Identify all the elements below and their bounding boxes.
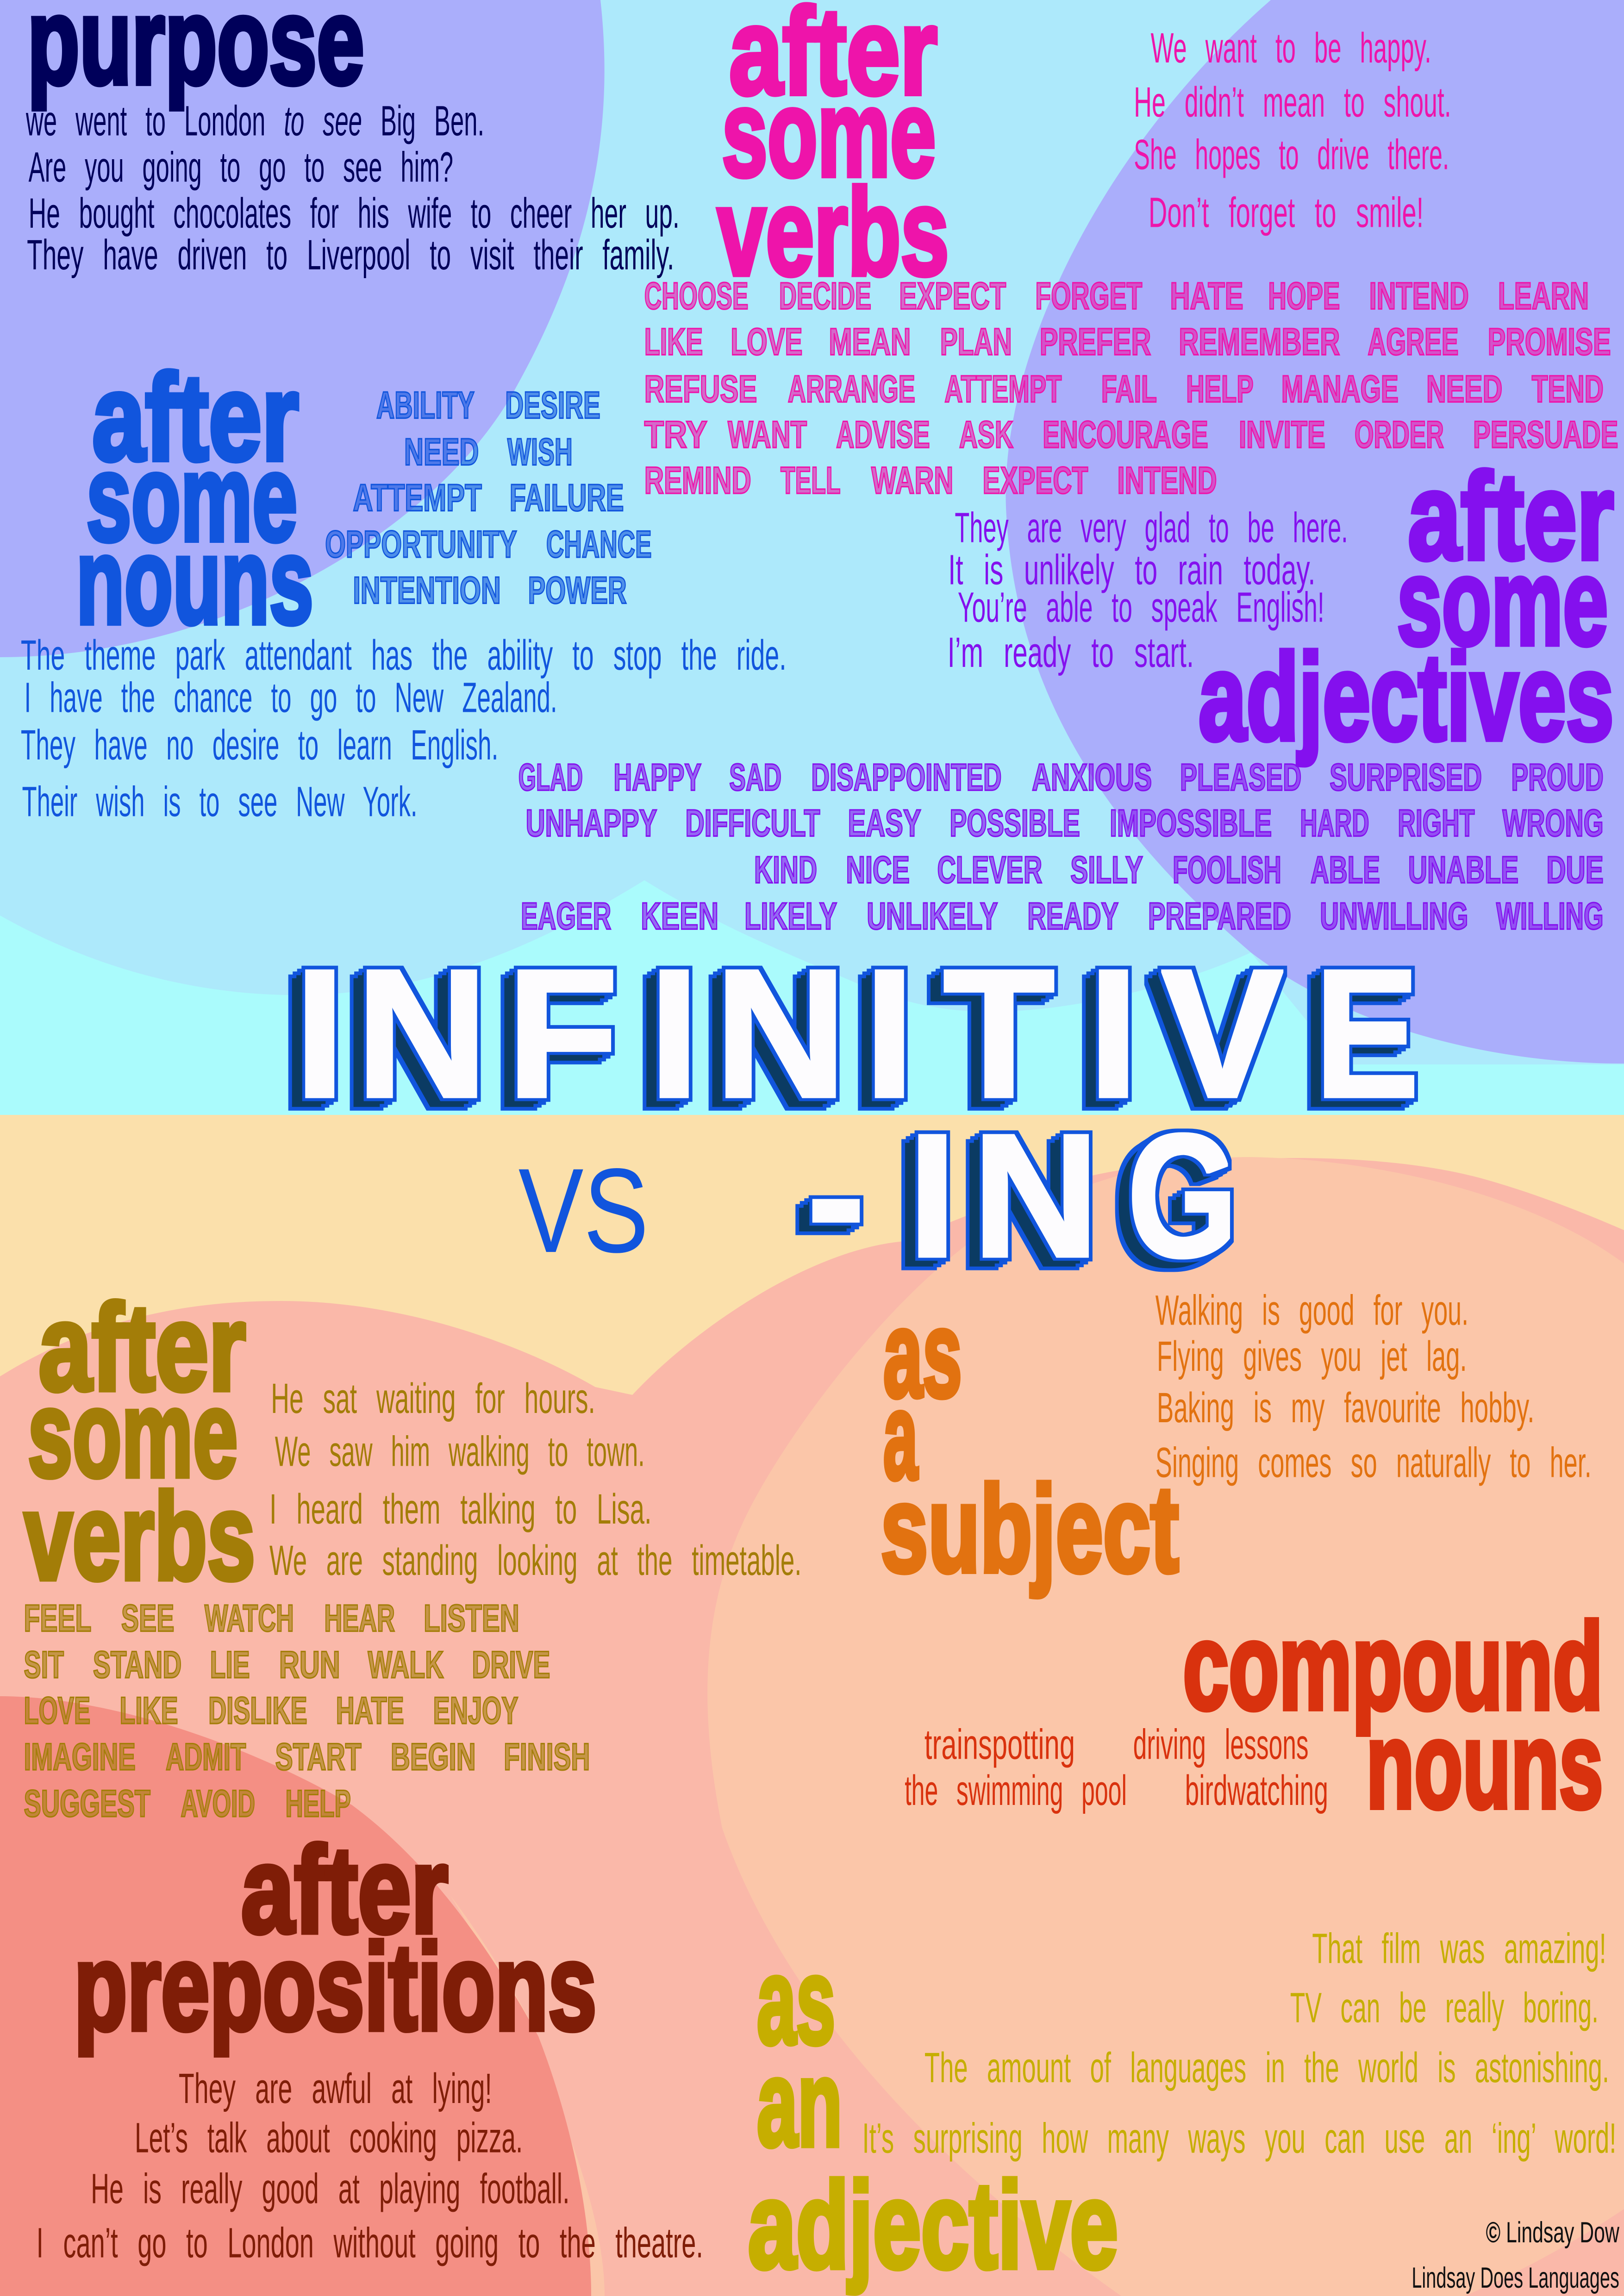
- background: light blue shape: [0, 0, 1624, 1064]
- word list: nouns followed by infinitive: [325, 383, 652, 612]
- word list: adjectives followed by infinitive: PREPARED: [1148, 894, 1291, 938]
- examples: purpose: They have driven to Liverpool to visit their family.: [27, 233, 674, 280]
- word list: verbs followed by infinitive: ARRANGE: [788, 367, 915, 411]
- heading: as a subject: as: [883, 1285, 962, 1423]
- examples: after some adjectives: You’re able to speak English!: [958, 585, 1324, 632]
- heading: as an adjective: adjective: [748, 2156, 1118, 2294]
- examples: purpose: we went to London to see Big Ben.: [25, 99, 484, 146]
- word list: adjectives followed by infinitive: CLEVER: [937, 848, 1043, 891]
- examples: after prepositions: Let’s talk about cooking pizza.: [135, 2116, 523, 2162]
- word list: adjectives followed by infinitive: ABLE: [1311, 848, 1380, 891]
- background: upper cyan band: [0, 0, 1624, 1115]
- word list: adjectives followed by infinitive: UNHAPPY: [526, 801, 657, 845]
- examples: after some adjectives: It is unlikely to rain today.: [948, 548, 1316, 595]
- word list: adjectives followed by infinitive: RIGHT: [1398, 801, 1475, 845]
- word list: verbs followed by infinitive: TELL: [781, 458, 841, 502]
- background: peach band beside red shape: [450, 1896, 605, 2296]
- word list: verbs followed by -ing: HATE: [336, 1688, 404, 1732]
- heading: after some verbs: [25, 1279, 255, 1605]
- examples: as a subject: [1156, 1288, 1592, 1487]
- word list: verbs followed by -ing: LISTEN: [424, 1596, 519, 1640]
- examples: after some verbs: Don’t forget to smile!: [1149, 190, 1424, 237]
- examples: after some verbs: [1134, 26, 1451, 237]
- examples: after some adjectives: [948, 505, 1348, 677]
- word list: verbs followed by infinitive: WARN: [871, 458, 953, 502]
- word list: adjectives followed by infinitive: ANXIOUS: [1032, 755, 1152, 799]
- panel: compound nouns: [905, 1598, 1603, 1834]
- word list: adjectives followed by infinitive: UNLIKELY: [867, 894, 998, 938]
- word list: verbs followed by infinitive: EXPECT: [899, 274, 1006, 318]
- word list: verbs followed by -ing: DISLIKE: [208, 1688, 307, 1732]
- word list: verbs followed by -ing: BEGIN: [391, 1735, 476, 1779]
- heading: after prepositions: prepositions: [74, 1918, 597, 2056]
- word list: adjectives followed by infinitive: HAPPY: [613, 755, 701, 799]
- word list: verbs followed by -ing: LIE: [210, 1643, 250, 1686]
- word list: verbs followed by -ing: WALK: [368, 1643, 444, 1686]
- panel: purpose: [25, 0, 680, 280]
- heading: after some nouns: after: [92, 348, 299, 486]
- word list: verbs followed by infinitive: NEED: [1426, 367, 1502, 411]
- word list: verbs followed by -ing: IMAGINE: [24, 1735, 136, 1779]
- word list: verbs followed by -ing: WATCH: [205, 1596, 294, 1640]
- heading: after some verbs: some: [28, 1365, 237, 1503]
- panel: as an adjective: [748, 1926, 1617, 2294]
- heading: after prepositions: after: [241, 1821, 448, 1959]
- word list: verbs followed by -ing: LOVE: [24, 1688, 90, 1732]
- examples: after some nouns: The theme park attendant has the ability to stop the ride.: [21, 633, 787, 680]
- word list: adjectives followed by infinitive: SAD: [729, 755, 781, 799]
- word list: nouns followed by infinitive: DESIRE: [505, 383, 600, 427]
- word list: verbs followed by infinitive: INTEND: [1369, 274, 1469, 318]
- heading: compound nouns: [1183, 1598, 1603, 1834]
- word list: nouns followed by infinitive: POWER: [528, 568, 627, 612]
- word list: verbs followed by infinitive: LIKE: [644, 320, 703, 364]
- word list: adjectives followed by infinitive: DIFFICULT: [685, 801, 820, 845]
- examples: compound nouns: birdwatching: [1185, 1768, 1328, 1815]
- examples: purpose: Are you going to go to see him?: [29, 145, 453, 192]
- word list: verbs followed by infinitive: MEAN: [829, 320, 911, 364]
- heading: after prepositions: [74, 1821, 597, 2056]
- word list: adjectives followed by infinitive: EASY: [848, 801, 921, 845]
- examples: after some nouns: Their wish is to see New York.: [22, 779, 418, 827]
- word list: verbs followed by -ing: SUGGEST: [24, 1781, 150, 1825]
- examples: after some verbs: We saw him walking to town.: [275, 1430, 645, 1476]
- examples: compound nouns: [905, 1722, 1328, 1815]
- word list: adjectives followed by infinitive: SILLY: [1070, 848, 1143, 891]
- background: peach shape: [707, 1157, 1624, 2296]
- examples: after some nouns: [21, 633, 787, 827]
- title: VS: VS: [518, 1145, 649, 1278]
- credits: [1412, 2217, 1620, 2295]
- word list: verbs followed by -ing: HELP: [286, 1781, 351, 1825]
- background: right purple circle: [1006, 0, 1624, 1064]
- word list: verbs followed by infinitive: REMIND: [644, 458, 751, 502]
- examples: after prepositions: They are awful at lying!: [179, 2066, 492, 2113]
- word list: nouns followed by infinitive: INTENTION: [353, 568, 501, 612]
- word list: verbs followed by -ing: FINISH: [504, 1735, 590, 1779]
- word list: verbs followed by -ing: SIT: [24, 1643, 64, 1686]
- word list: verbs followed by -ing: AVOID: [181, 1781, 255, 1825]
- word list: verbs followed by infinitive: HELP: [1186, 367, 1254, 411]
- examples: after some verbs: He sat waiting for hours.: [271, 1376, 595, 1423]
- heading: after some nouns: nouns: [76, 512, 313, 650]
- heading: after some verbs: verbs: [718, 163, 949, 301]
- word list: adjectives followed by infinitive: [518, 755, 1604, 938]
- word list: verbs followed by infinitive: REMEMBER: [1179, 320, 1340, 364]
- word list: verbs followed by infinitive: EXPECT: [983, 458, 1088, 502]
- heading: as an adjective: an: [757, 2035, 842, 2172]
- word list: verbs followed by -ing: ENJOY: [433, 1688, 518, 1732]
- heading: after some nouns: [76, 348, 313, 650]
- word list: adjectives followed by infinitive: DISAPPOINTED: [811, 755, 1002, 799]
- word list: verbs followed by infinitive: FAIL: [1101, 367, 1157, 411]
- word list: verbs followed by infinitive: ASK: [959, 412, 1013, 456]
- word list: adjectives followed by infinitive: UNABLE: [1408, 848, 1518, 891]
- panel: after some verbs (ing): [24, 1279, 802, 1825]
- background: top left purple circle: [0, 0, 605, 657]
- word list: verbs followed by -ing: HEAR: [324, 1596, 395, 1640]
- heading: as a subject: subject: [881, 1460, 1179, 1598]
- word list: verbs followed by -ing: ADMIT: [166, 1735, 246, 1779]
- examples: purpose: [25, 99, 680, 280]
- word list: nouns followed by infinitive: OPPORTUNITY: [325, 522, 517, 566]
- background: lower tan band: [0, 1115, 1624, 2296]
- heading: after some nouns: some: [87, 429, 297, 566]
- word list: verbs followed by infinitive: HATE: [1170, 274, 1243, 318]
- word list: verbs followed by infinitive: REFUSE: [644, 367, 757, 411]
- examples: after prepositions: [36, 2066, 703, 2268]
- heading: after some verbs: verbs: [25, 1468, 255, 1605]
- word list: adjectives followed by infinitive: PLEASED: [1180, 755, 1301, 799]
- panel: after some adjectives: [518, 448, 1614, 938]
- word list: verbs followed by infinitive: INVITE: [1239, 412, 1325, 456]
- examples: after some verbs: [269, 1376, 802, 1585]
- word list: verbs followed by infinitive: [644, 274, 1618, 502]
- word list: verbs followed by -ing: LIKE: [119, 1688, 178, 1732]
- examples: after some nouns: I have the chance to go to New Zealand.: [25, 676, 557, 722]
- word list: verbs followed by -ing: RUN: [279, 1643, 340, 1686]
- examples: as an adjective: [862, 1926, 1617, 2163]
- title: -ING: -IN G: [807, 1098, 1237, 1294]
- word list: verbs followed by -ing: STAND: [93, 1643, 181, 1686]
- word list: verbs followed by infinitive: LOVE: [731, 320, 802, 364]
- word list: verbs followed by infinitive: AGREE: [1368, 320, 1459, 364]
- background: red shape: [0, 1696, 591, 2296]
- word list: verbs followed by -ing: DRIVE: [472, 1643, 550, 1686]
- heading: as an adjective: as: [757, 1932, 835, 2070]
- word list: nouns followed by infinitive: ATTEMPT: [353, 476, 482, 520]
- heading: as a subject: [881, 1285, 1179, 1598]
- examples: compound nouns: trainspotting: [924, 1722, 1075, 1769]
- heading: after some verbs: after: [39, 1279, 246, 1416]
- word list: verbs followed by infinitive: CHOOSE: [644, 274, 748, 318]
- word list: verbs followed by -ing: [24, 1596, 590, 1825]
- examples: after prepositions: He is really good at playing football.: [91, 2167, 569, 2214]
- heading: after some verbs: [718, 0, 949, 301]
- word list: verbs followed by infinitive: TRY: [644, 412, 707, 456]
- examples: compound nouns: driving lessons: [1133, 1722, 1309, 1769]
- word list: adjectives followed by infinitive: SURPRISED: [1330, 755, 1482, 799]
- word list: adjectives followed by infinitive: NICE: [846, 848, 910, 891]
- word list: adjectives followed by infinitive: KIND: [754, 848, 817, 891]
- word list: adjectives followed by infinitive: UNWILLING: [1320, 894, 1468, 938]
- heading: as a subject: a: [883, 1367, 918, 1505]
- examples: purpose: He bought chocolates for his wife to cheer her up.: [29, 191, 680, 238]
- panel: as a subject: [881, 1285, 1592, 1598]
- examples: after prepositions: I can’t go to London without going to the theatre.: [36, 2221, 703, 2268]
- examples: after some adjectives: I’m ready to start.: [948, 630, 1194, 677]
- word list: adjectives followed by infinitive: GLAD: [518, 755, 583, 799]
- word list: adjectives followed by infinitive: HARD: [1300, 801, 1369, 845]
- word list: nouns followed by infinitive: WISH: [507, 430, 573, 474]
- examples: after some nouns: They have no desire to learn English.: [21, 723, 498, 770]
- panel: after some nouns: [21, 348, 787, 827]
- examples: compound nouns: the swimming pool: [905, 1768, 1127, 1815]
- word list: verbs followed by infinitive: PLAN: [940, 320, 1012, 364]
- title: INFINITIVE: INFINITIV E: [294, 933, 1419, 1136]
- word list: verbs followed by infinitive: ENCOURAGE: [1043, 412, 1208, 456]
- word list: verbs followed by infinitive: PREFER: [1040, 320, 1151, 364]
- word list: adjectives followed by infinitive: FOOLISH: [1173, 848, 1281, 891]
- heading: as an adjective: [748, 1932, 1118, 2294]
- background: pink shape: [0, 1158, 1624, 2296]
- word list: adjectives followed by infinitive: KEEN: [641, 894, 718, 938]
- word list: nouns followed by infinitive: CHANCE: [546, 522, 652, 566]
- word list: verbs followed by infinitive: FORGET: [1035, 274, 1143, 318]
- heading: after some adjectives: [1199, 448, 1614, 766]
- word list: verbs followed by infinitive: ADVISE: [836, 412, 930, 456]
- examples: after some adjectives: They are very glad to be here.: [955, 505, 1348, 553]
- panel: after some verbs (infinitive): [644, 0, 1618, 502]
- examples: after some verbs: I heard them talking to Lisa.: [269, 1487, 652, 1534]
- word list: verbs followed by infinitive: MANAGE: [1281, 367, 1399, 411]
- word list: verbs followed by infinitive: ATTEMPT: [944, 367, 1062, 411]
- word list: adjectives followed by infinitive: READY: [1027, 894, 1118, 938]
- word list: verbs followed by infinitive: ORDER: [1355, 412, 1444, 456]
- word list: adjectives followed by infinitive: EAGER: [521, 894, 612, 938]
- word list: verbs followed by infinitive: HOPE: [1268, 274, 1340, 318]
- word list: verbs followed by infinitive: WANT: [728, 412, 807, 456]
- word list: adjectives followed by infinitive: LIKELY: [744, 894, 837, 938]
- examples: after some verbs: We are standing looking at the timetable.: [269, 1538, 802, 1585]
- heading: after some verbs: some: [722, 64, 936, 202]
- word list: nouns followed by infinitive: ABILITY: [376, 383, 475, 427]
- word list: nouns followed by infinitive: NEED: [404, 430, 479, 474]
- word list: verbs followed by infinitive: INTEND: [1118, 458, 1217, 502]
- panel: after prepositions: [36, 1821, 703, 2268]
- word list: verbs followed by -ing: START: [275, 1735, 362, 1779]
- word list: adjectives followed by infinitive: IMPOSSIBLE: [1110, 801, 1272, 845]
- word list: nouns followed by infinitive: FAILURE: [510, 476, 624, 520]
- word list: adjectives followed by infinitive: POSSIBLE: [949, 801, 1080, 845]
- word list: verbs followed by -ing: SEE: [121, 1596, 174, 1640]
- word list: verbs followed by infinitive: DECIDE: [779, 274, 871, 318]
- word list: verbs followed by -ing: FEEL: [24, 1596, 92, 1640]
